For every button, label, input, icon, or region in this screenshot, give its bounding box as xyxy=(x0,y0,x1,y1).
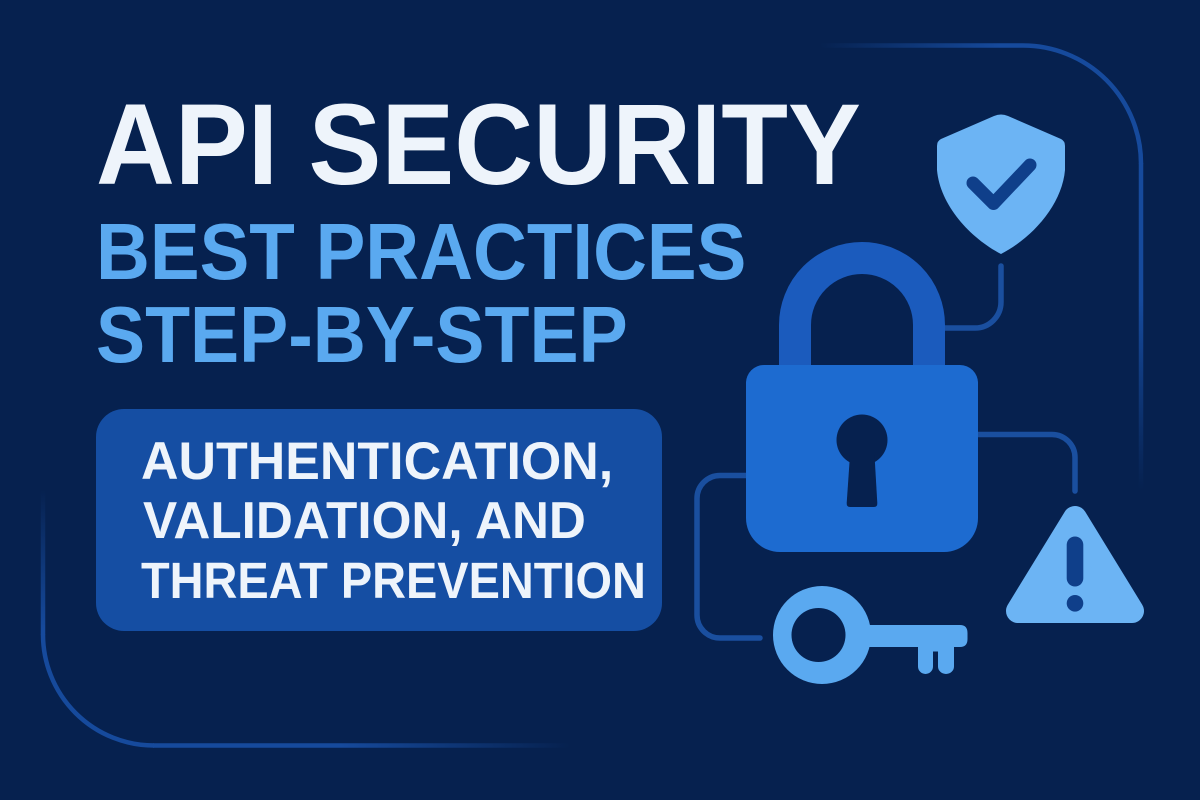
icon: padlock xyxy=(746,258,978,552)
connector: lock to warning xyxy=(970,434,1075,491)
callout panel: THREAT PREVENTION xyxy=(141,552,646,609)
subtitle: STEP-BY-STEP xyxy=(96,290,628,379)
subtitle xyxy=(96,207,746,379)
icon: warning triangle xyxy=(1018,518,1132,612)
icon: key xyxy=(773,586,968,684)
callout panel xyxy=(96,409,662,631)
connector: shield to lock xyxy=(940,266,1001,328)
subtitle: BEST PRACTICES xyxy=(96,207,746,296)
title: API SECURITY xyxy=(96,81,861,209)
callout panel: AUTHENTICATION, xyxy=(141,432,613,491)
callout panel: VALIDATION, AND xyxy=(143,492,586,550)
connector: lock to key xyxy=(697,476,760,638)
icon: shield xyxy=(937,114,1065,254)
